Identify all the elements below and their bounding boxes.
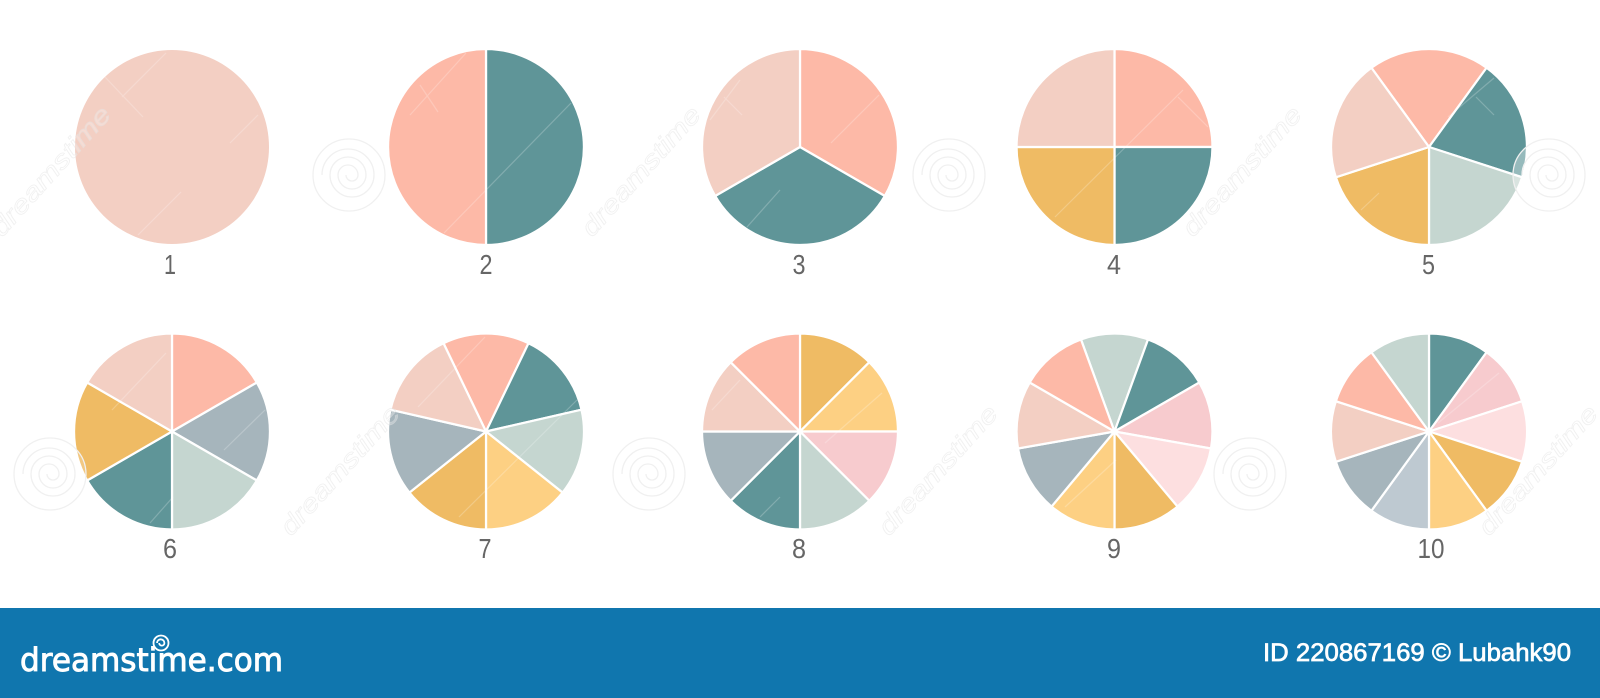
- watermark text 3: dreamstime: [1177, 101, 1308, 242]
- watermark spiral 1: [313, 139, 385, 211]
- pie chart 4: four segments: [1017, 49, 1212, 245]
- icon: logo spiral: [154, 636, 168, 650]
- watermark spiral 5: [613, 438, 685, 510]
- pie chart 1: one segment: [75, 50, 269, 244]
- watermark text 2: dreamstime: [576, 101, 707, 242]
- footer banner: [0, 608, 1600, 698]
- footer logo wordmark: dreamstime.com: [20, 641, 283, 679]
- pie chart 10: ten segments: [1318, 318, 1540, 545]
- watermark spiral 3: [1513, 139, 1585, 211]
- number 8: 8: [792, 533, 806, 564]
- number 3: 3: [792, 249, 806, 280]
- pie chart 7: seven segments: [362, 310, 599, 552]
- number 5: 5: [1422, 249, 1435, 280]
- footer image id and credit: ID 220867169 © Lubahk90: [1263, 639, 1571, 667]
- watermark spiral 6: [1214, 438, 1286, 510]
- pie chart 9: nine segments: [1003, 318, 1231, 547]
- number 2: 2: [480, 249, 492, 280]
- watermark text 5: dreamstime: [873, 400, 1004, 541]
- watermark text 4: dreamstime: [275, 400, 406, 541]
- pie chart 5: five segments: [1307, 13, 1562, 266]
- number 6: 6: [163, 533, 177, 564]
- watermark spiral 2: [913, 139, 985, 211]
- number 10: 10: [1418, 533, 1444, 564]
- pie chart 8: eight segments: [682, 313, 918, 550]
- number 1: 1: [164, 249, 176, 280]
- pie chart 2: two segments: [388, 49, 584, 245]
- watermark spiral 4: [14, 438, 86, 510]
- number 7: 7: [478, 533, 492, 564]
- pie chart 6: six segments: [45, 309, 299, 554]
- number 4: 4: [1107, 249, 1121, 280]
- watermark text 6: dreamstime: [1473, 400, 1600, 541]
- number 9: 9: [1107, 533, 1121, 564]
- pie chart 3: three segments: [666, 38, 898, 281]
